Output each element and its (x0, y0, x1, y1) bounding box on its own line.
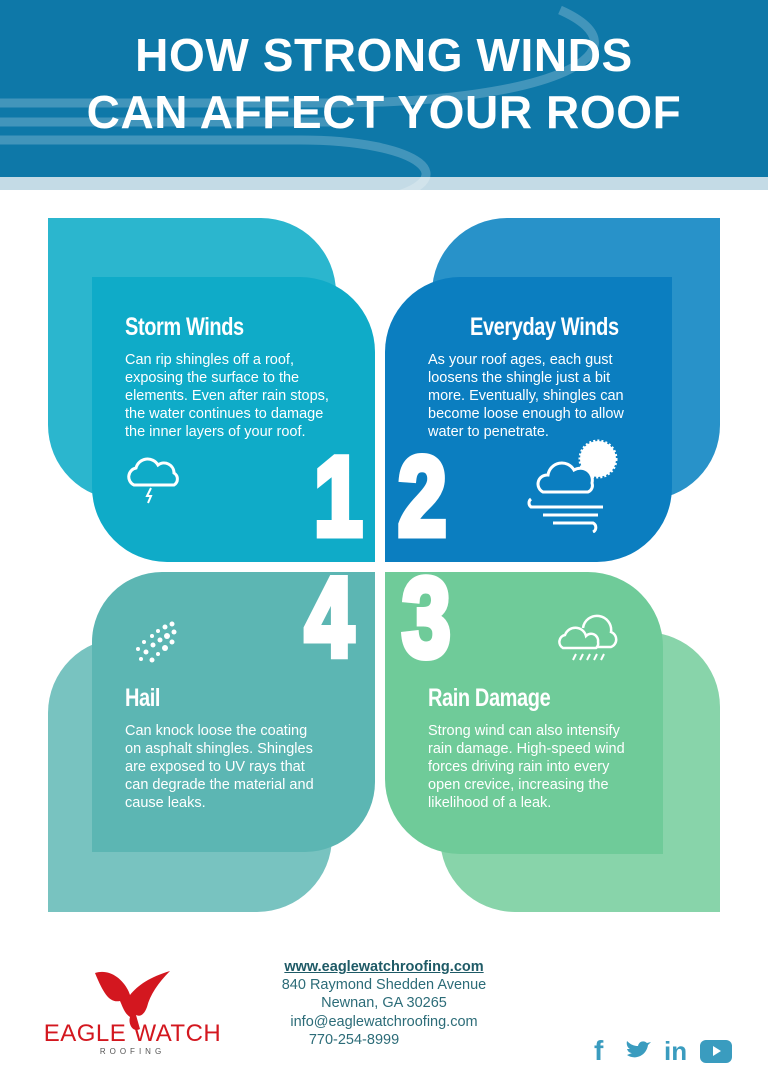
contact info: info@eaglewatchroofing.com (290, 1014, 478, 1030)
icon: hail (136, 622, 176, 662)
text: rain damage: Strong wind can also intensify (428, 723, 620, 739)
text: everyday winds: loosens the shingle just a bit (428, 370, 610, 386)
title (87, 29, 681, 138)
logo: EAGLE WATCH (44, 1020, 221, 1047)
heading: storm winds: Storm Winds (125, 313, 244, 341)
social icons: f (594, 1035, 603, 1066)
contact info (282, 959, 486, 1048)
logo: ROOFING (100, 1047, 165, 1056)
number 3: 3 (402, 555, 451, 680)
text: hail: on asphalt shingles. Shingles (125, 741, 313, 757)
contact info: 840 Raymond Shedden Avenue (282, 977, 486, 993)
text: hail: are exposed to UV rays that (125, 759, 305, 775)
text: storm winds (125, 352, 329, 440)
text: hail (125, 723, 314, 811)
text: storm winds: elements. Even after rain stops, (125, 388, 329, 404)
text: everyday winds: more. Eventually, shingles can (428, 388, 624, 404)
text: rain damage: rain damage. High-speed wind (428, 741, 625, 757)
social icons: in (664, 1036, 687, 1066)
contact info: Newnan, GA 30265 (321, 995, 447, 1011)
text: everyday winds: As your roof ages, each gust (428, 352, 613, 368)
contact info: 770-254-8999 (309, 1032, 399, 1048)
title: CAN AFFECT YOUR ROOF (87, 86, 681, 138)
text: everyday winds: water to penetrate. (428, 424, 549, 440)
text: rain damage: likelihood of a leak. (428, 795, 551, 811)
icon: storm cloud (127, 458, 179, 504)
heading: hail: Hail (125, 684, 160, 712)
number 4: 4 (305, 555, 354, 680)
logo (44, 971, 221, 1056)
panel: storm winds (92, 277, 375, 562)
heading: rain damage: Rain Damage (428, 684, 550, 712)
text: storm winds: exposing the surface to the (125, 370, 299, 386)
text: hail: Can knock loose the coating (125, 723, 307, 739)
text: everyday winds (428, 352, 624, 440)
number 1: 1 (314, 434, 363, 559)
number 2: 2 (398, 434, 447, 559)
contact info: www.eaglewatchroofing.com (284, 959, 484, 975)
icon: eagle (95, 971, 170, 1030)
text: rain damage: open crevice, increasing the (428, 777, 609, 793)
text: storm winds: the water continues to damage (125, 406, 323, 422)
panel: rain damage (385, 572, 663, 854)
panel: hail (92, 572, 375, 852)
text: storm winds: the inner layers of your roof. (125, 424, 306, 440)
text: storm winds: Can rip shingles off a roof, (125, 352, 294, 368)
text: hail: cause leaks. (125, 795, 206, 811)
icon: rain cloud (558, 614, 618, 660)
title: HOW STRONG WINDS (135, 29, 633, 81)
social icons (594, 1035, 732, 1066)
text: rain damage (428, 723, 625, 811)
text: everyday winds: become loose enough to allow (428, 406, 624, 422)
heading: everyday winds: Everyday Winds (470, 313, 619, 341)
panel: everyday winds (385, 277, 672, 562)
text: hail: can degrade the material and (125, 777, 314, 793)
text: rain damage: forces driving rain into every (428, 759, 609, 775)
icon: wind cloud sun (528, 440, 618, 533)
back shapes (48, 218, 336, 500)
header banner (0, 0, 768, 190)
